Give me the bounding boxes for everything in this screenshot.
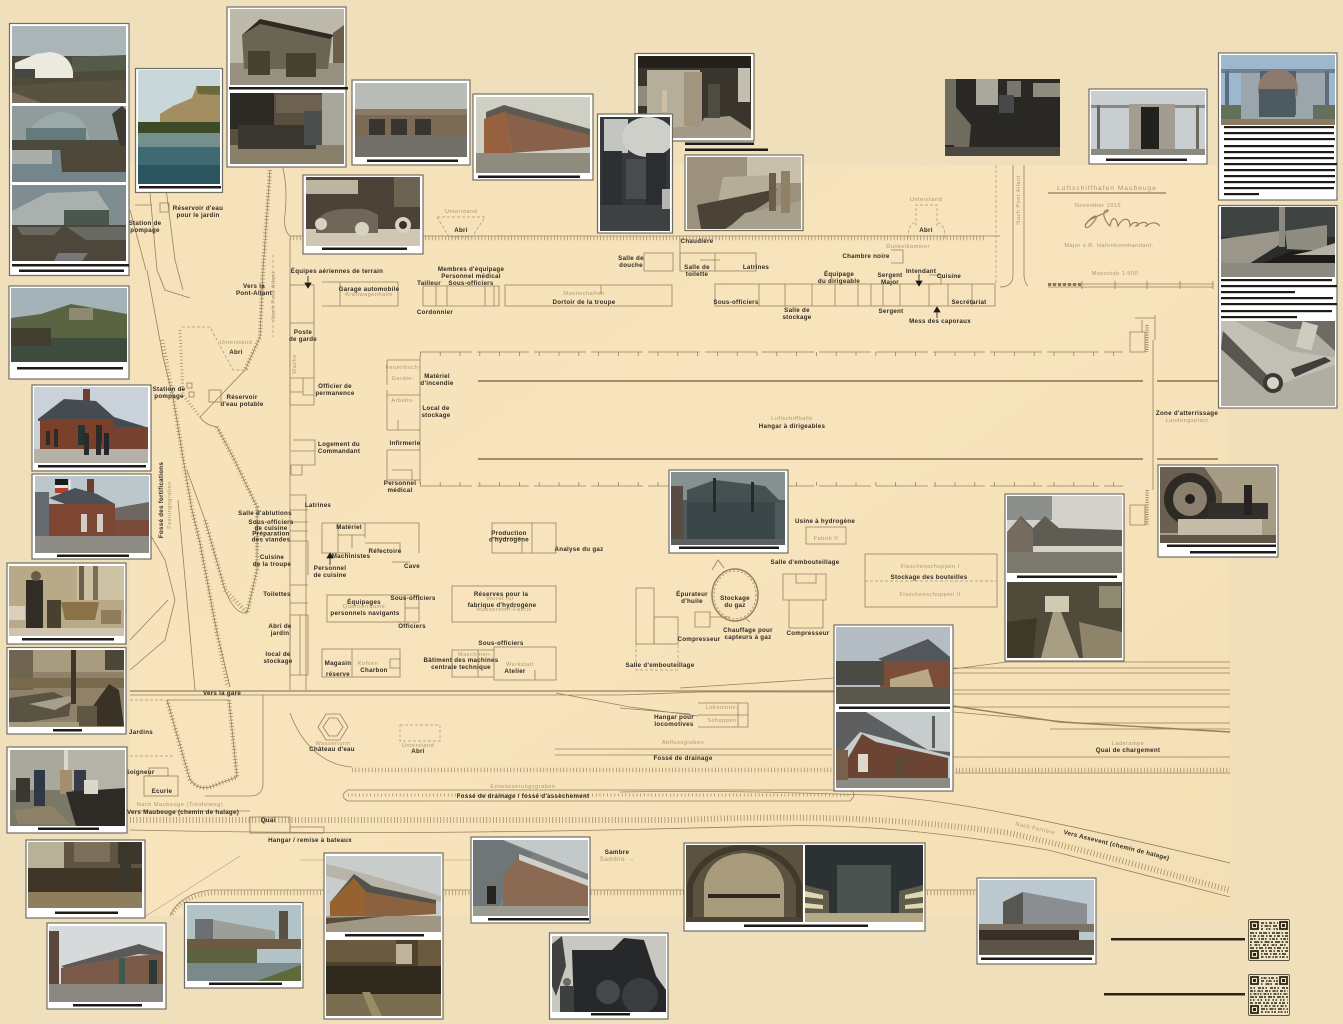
label: airship hangar: Hangar à dirigeables <box>759 423 826 430</box>
label: cellar: Cave <box>404 563 420 570</box>
photo: men at bench <box>230 93 344 164</box>
label: shelter south: Abri <box>411 748 425 755</box>
label: gas storage: du gaz <box>724 602 746 609</box>
label: compressor west: Compresseur <box>678 636 721 643</box>
label: equipment: Matériel <box>336 524 362 531</box>
label: gas analysis: Analyse du gaz <box>555 546 603 553</box>
label: troop kitchen: de la troupe <box>253 561 291 568</box>
label: flying personnel: personnels navigants <box>330 610 400 617</box>
label: gas heating: Chauffage pour <box>723 627 773 634</box>
label: officers: Officiers <box>398 623 426 630</box>
caption rules below office photo <box>685 142 768 151</box>
label: shower room: Salle de <box>618 255 644 262</box>
label: dormitory: Dortoir de la troupe <box>552 299 616 306</box>
caption bar <box>981 958 1092 960</box>
crew quarters: Quartierräume <box>343 604 385 610</box>
site plan linework <box>130 165 1230 916</box>
label: NCOs south: Sous-officiers <box>478 640 524 647</box>
photo card: fortress wall and water <box>136 68 222 192</box>
label: to Pont-Allant: Pont-Allant <box>236 290 272 297</box>
photo: concrete trough <box>1221 207 1335 277</box>
caption bar <box>478 176 580 178</box>
photo: bottle store interior <box>1007 582 1122 658</box>
gas holder <box>712 560 758 622</box>
commander line: Major z.R. Hafenkommandant. <box>1064 243 1154 249</box>
label: sergeant major: Sergent <box>878 272 902 279</box>
label: shower room: douche <box>619 262 643 269</box>
photo: hangar and roofs <box>12 185 126 261</box>
label: duty officer: permanence <box>315 390 355 397</box>
leader line 2 <box>1104 993 1245 996</box>
photo: gas works exterior <box>1007 496 1122 573</box>
label: pump station: pompage <box>154 393 184 400</box>
label: secretariat: Secrétariat <box>951 299 987 306</box>
label: ground crew: Équipes aériennes de terrain <box>291 267 383 275</box>
label: garden shelter: jardin <box>270 630 289 637</box>
reserve: Vorrat für <box>486 596 514 602</box>
label: latrines: Latrines <box>305 502 331 509</box>
caption bar <box>209 982 282 985</box>
label: guard post: Poste <box>294 329 312 336</box>
leader line 1 <box>1111 938 1245 940</box>
label: oil purifier: Épurateur <box>676 591 708 598</box>
photo card: office doorway <box>635 54 754 141</box>
label: fortification moat: Fossé des fortifications <box>158 462 165 538</box>
label: toilet room: toilette <box>686 271 709 278</box>
label: airship crew: du dirigeable <box>818 278 860 285</box>
towpath: Nach Maubeuge (Treidelweg) <box>137 802 223 808</box>
label: NCOs east: Sous-officiers <box>713 299 759 306</box>
caption bar <box>19 270 124 272</box>
caption bar <box>1106 158 1187 161</box>
label: hydrogen plant: Usine à hydrogène <box>795 518 855 525</box>
shelter south: Unterstand <box>402 743 434 749</box>
label: landing zone: Zone d'atterrissage <box>1156 410 1218 417</box>
photo: hangar and moat <box>12 106 126 182</box>
caption rule <box>229 87 348 90</box>
label: reserve: réserve <box>326 671 350 678</box>
caption bar <box>488 918 589 920</box>
locomotive shed <box>698 703 748 727</box>
label: garden shelter: Abri de <box>268 623 292 630</box>
caption bar <box>73 1004 142 1006</box>
photo: brick depot <box>326 856 441 932</box>
loco shed: Lokomotiv- <box>706 705 738 711</box>
photo: brick house with crane <box>836 712 950 788</box>
photo card: barracks bedroom <box>7 648 126 734</box>
label: kitchen staff: de cuisine <box>313 572 347 579</box>
photo: house with sacks <box>836 627 950 704</box>
label: hydrogen production: d'hydrogène <box>489 536 529 544</box>
label: wash room: Salle d'ablutions <box>238 510 292 517</box>
label: storage room east: stockage <box>782 314 812 321</box>
photo card: brick guardhouse with soldiers <box>32 385 151 471</box>
hydrogen plant II and compressor <box>783 527 846 628</box>
label: crew members: Sous-officiers <box>448 280 494 287</box>
label: Sambre: Sambre <box>605 849 629 856</box>
caption bar <box>55 912 118 914</box>
label: groom: Soigneur <box>125 769 155 776</box>
photo card: locomotive <box>550 933 668 1019</box>
label: drinking water reservoir: d'eau potable <box>220 401 264 408</box>
label: machine building: centrale technique <box>431 664 491 671</box>
label: troop kitchen: Cuisine <box>260 554 284 561</box>
caption bar <box>744 924 868 927</box>
label: toilet room: Salle de <box>684 264 710 271</box>
magazine and workshop block <box>322 647 556 680</box>
label: to the station: Vers la gare <box>203 690 241 697</box>
label: duty officer: Officier de <box>318 383 352 390</box>
eastern barracks <box>644 238 995 306</box>
label: to Maubeuge: Vers Maubeuge (chemin de halage) <box>127 809 239 816</box>
photo group: coloured brick workshops <box>324 853 443 1019</box>
label: kitchen NCOs: de cuisine <box>254 525 288 532</box>
signature Massus <box>1085 210 1160 228</box>
label: infirmary: Infirmerie <box>390 440 421 447</box>
caption rule <box>12 264 129 266</box>
label: quartermaster: Intendant <box>906 268 936 275</box>
label: guard post: de garde <box>289 336 317 343</box>
label: latrines east: Latrines <box>743 264 769 271</box>
label: gardens: Jardins <box>129 729 153 736</box>
loading ramp: Laderampe <box>1112 741 1144 747</box>
QR code 2 <box>1248 974 1290 1016</box>
photo card: gas holder frame <box>669 470 788 553</box>
western building row <box>290 285 315 690</box>
label: stable: Ecurie <box>152 788 173 795</box>
label: sergeant major: Major <box>881 279 899 286</box>
photo group: wooden hut and workshop <box>227 7 348 167</box>
cylinder storage sheds <box>865 554 997 607</box>
garage and workshops <box>322 282 672 306</box>
label: pump station north: pompage <box>130 227 160 234</box>
photo card: brick building with flag <box>32 474 151 559</box>
coal: Kohlen <box>358 661 378 667</box>
hydrogen factory: Wasserstoff-Fabrik <box>476 607 532 613</box>
text card: top right with hangar photo <box>1218 53 1337 200</box>
caption bar <box>38 828 99 830</box>
hangar: Luftschiffhalle <box>771 416 813 422</box>
photo: composite hangar front <box>1221 55 1335 125</box>
bottle sheds: Flaschenschuppen I <box>900 564 960 570</box>
reservoirs and pump stations <box>160 203 221 402</box>
caption rule <box>1167 544 1276 547</box>
photo group: hangars at Maubeuge <box>10 24 129 276</box>
hydrogen production block <box>492 523 556 553</box>
photo: concrete pit <box>1221 321 1335 406</box>
photo card: kitchen staff at stove <box>7 747 127 833</box>
drainage ditch: Entwässerungsgraben <box>490 784 556 790</box>
label: compressor east: Compresseur <box>787 630 830 637</box>
label: bottling room west: Salle d'embouteillage <box>626 662 695 669</box>
garage: Kraftwagenhalle <box>345 292 393 298</box>
label: machine building: Bâtiment des machines <box>424 657 498 664</box>
label: to Assevent: Vers Assevent (chemin de halage) <box>1063 829 1170 862</box>
crew quarters and reserve area <box>327 586 556 622</box>
photo group: small brick houses <box>834 625 953 791</box>
label: reserves: Réserves pour la <box>474 591 528 598</box>
label: fire equipment: d'incendie <box>420 380 454 387</box>
label: hydrogen factory: fabrique d'hydrogène <box>468 602 537 609</box>
faded fortification label: Festungsgraben <box>167 481 173 529</box>
label: NCOs: Sous-officiers <box>390 595 436 602</box>
label: kitchen NCOs: Préparation <box>252 530 290 538</box>
label: airship crew: Équipage <box>824 271 854 278</box>
dark room: Dunkelkammer <box>886 244 930 250</box>
redacted text lines <box>1224 126 1337 195</box>
photo card: boiler room <box>598 114 674 233</box>
label: commander housing: Logement du <box>318 441 360 448</box>
label: toilets: Toilettes <box>263 591 291 598</box>
scale label: Massstab 1:500 <box>1092 271 1138 277</box>
photo card: low brick barracks <box>47 923 166 1009</box>
label: kitchen NCOs: Sous-officiers <box>248 519 294 526</box>
photo card: officer in workshop <box>7 563 126 644</box>
photo: hangar frame arch <box>686 845 803 922</box>
shelter: Unterstand <box>445 209 477 215</box>
label: to Pont-Allant: Vers la <box>243 283 265 290</box>
label: locomotive shed: Hangar pour <box>654 714 694 721</box>
caption bar <box>139 186 221 188</box>
caption bar <box>839 706 950 709</box>
photo: dark interior <box>326 940 441 1016</box>
arrow: corporals mess <box>934 307 940 318</box>
label: medical staff: médical <box>387 487 413 494</box>
label: storage room: local de <box>265 651 291 658</box>
fire station: Feuerlösch- <box>385 365 421 371</box>
label: garden reservoir: pour le jardin <box>176 212 220 219</box>
photo card: brick barracks <box>473 94 593 180</box>
machinery: Maschinen- <box>458 652 492 658</box>
label: shelter: Abri <box>229 349 243 356</box>
label: shelter east: Abri <box>919 227 933 234</box>
caption bar <box>367 160 458 162</box>
photo: hangar interior <box>805 845 923 922</box>
towpath east: Nach Ferrière <box>1015 822 1056 837</box>
QR code 1 <box>1248 920 1290 960</box>
caption bar <box>57 554 129 557</box>
French map labels <box>125 205 1218 862</box>
label: garden reservoir: Réservoir d'eau <box>173 205 223 212</box>
label: store: Magasin <box>325 660 351 667</box>
caption bar <box>38 465 146 468</box>
stables and quay <box>144 768 324 833</box>
photo: soldiers by hut <box>230 9 344 85</box>
drainage: Abflussgraben <box>662 740 704 746</box>
photo card: workers at trough <box>685 155 803 230</box>
label: cobbler: Cordonnier <box>417 309 453 316</box>
photo card: citadel hillside <box>9 286 129 379</box>
caption bar <box>1190 551 1276 554</box>
water tower plan <box>318 714 348 740</box>
Sambre river towpath <box>130 791 1230 916</box>
airship hangar walls and rails <box>420 315 1230 525</box>
label: commander housing: Commandant <box>318 448 360 455</box>
label: kitchen NCOs: des viandes <box>252 536 291 544</box>
arrow: quartermaster <box>916 274 922 286</box>
shelter east: Unterstand <box>910 197 942 203</box>
label: crew members: Personnel médical <box>441 273 501 280</box>
photo: machinery hall, no frame <box>945 79 1060 156</box>
label: quay: Quai <box>261 817 275 824</box>
bottle sheds II: Flaschenschuppen II <box>899 592 961 598</box>
guardhouse: Wache <box>292 354 298 374</box>
redacted text lines <box>1221 279 1337 318</box>
service buildings along hangar <box>387 360 420 480</box>
photo card: hangar and train <box>977 878 1096 964</box>
label: bottling room: Salle d'embouteillage <box>771 559 840 566</box>
photo: white hangar <box>12 26 126 103</box>
water tower: Wasserturm <box>316 741 350 747</box>
caption bar <box>322 248 407 250</box>
caption bar <box>53 729 82 732</box>
label: hydrogen production: Production <box>491 530 527 537</box>
label: storage: stockage <box>421 412 451 419</box>
photo card: flywheel engine <box>1158 465 1278 557</box>
label: crew members: Membres d'équipage <box>438 266 504 273</box>
label: kitchen staff: Personnel <box>314 565 346 572</box>
label: pump station north: Station de <box>129 220 161 227</box>
rail tracks <box>130 662 1230 732</box>
location arrows <box>305 274 940 565</box>
dormitory: Mannschaften <box>563 291 605 297</box>
QR code with rule 1 <box>1111 920 1290 960</box>
label: drainage ditch: Fossé de drainage / fossé d'assèchement <box>457 793 589 800</box>
photo card: automobile in garage <box>303 175 423 254</box>
photo group: hangar under construction and interior <box>684 843 925 931</box>
bottling hall and compressors <box>636 588 730 670</box>
photo card: hangar door model <box>1089 89 1207 164</box>
caption bar <box>17 367 123 370</box>
label: bottle storage: Stockage des bouteilles <box>891 574 968 581</box>
photo card: machine building gable <box>471 837 590 923</box>
label: dark room: Chambre noire <box>842 253 890 260</box>
shelter west: Unterstand <box>220 340 252 346</box>
label: storage room east: Salle de <box>784 307 810 314</box>
photo card: hangar with water tower <box>184 902 303 988</box>
plan paper sheet <box>130 165 1229 916</box>
northern perimeter fence <box>290 165 1028 287</box>
plan scale bar <box>1048 281 1213 289</box>
label: kitchen: Cuisine <box>937 273 961 280</box>
drainage ditches and canal <box>290 713 1230 801</box>
label: boat shed: Hangar / remise à bateaux <box>268 837 352 844</box>
river name: Sambre → <box>599 856 635 863</box>
label: gas storage: Stockage <box>720 595 750 602</box>
label: locomotive shed: locomotives <box>654 721 694 728</box>
loco shed II: Schuppen <box>707 718 737 724</box>
text card: right with concrete structures <box>1218 206 1337 408</box>
label: pump station: Station de <box>153 386 185 393</box>
southern moat <box>130 695 263 796</box>
label: oil purifier: d'huile <box>681 598 703 605</box>
label: workshop: Atelier <box>504 668 526 675</box>
QR code with rule 2 <box>1104 974 1290 1016</box>
plan title: Luftschiffhafen Maubeuge <box>1057 185 1157 192</box>
landing ground: Landungsplatz <box>1166 418 1208 424</box>
label: storage room: stockage <box>263 658 293 665</box>
photo card: long brick garage <box>352 80 470 165</box>
photo card: mess hall <box>26 840 145 918</box>
photo group: gas works sheds <box>1005 494 1124 661</box>
label: water tower: Château d'eau <box>309 746 355 753</box>
label: drainage: Fossé de drainage <box>653 755 713 762</box>
arrow: ground crew <box>305 276 311 288</box>
label: storage: Local de <box>422 405 450 412</box>
canteen block <box>322 523 419 562</box>
fortification moat west <box>130 165 290 690</box>
label: shelter top: Abri <box>454 227 468 234</box>
hydrogen plant: Fabrik II <box>814 536 838 542</box>
vertical road labels: Nach Pont Allant <box>1016 175 1022 225</box>
work space: Arbeits- <box>391 398 415 404</box>
title underline <box>1048 192 1166 194</box>
label: boiler: Chaudière <box>681 238 714 245</box>
arrow: kitchen staff <box>327 553 333 565</box>
label: fire equipment: Matériel <box>424 373 450 380</box>
label: refectory: Réfectoire <box>368 548 402 555</box>
faded German plan labels <box>137 175 1208 863</box>
label: gas heating: capteurs à gaz <box>725 634 771 641</box>
label: car garage: Garage automobile <box>339 286 400 293</box>
label: drinking water reservoir: Réservoir <box>226 394 258 401</box>
label: crews: Équipages <box>347 598 381 606</box>
vertical road label west: Nach Pont Allant <box>271 271 277 321</box>
caption bar <box>1017 576 1117 578</box>
label: medical staff: Personnel <box>384 480 416 487</box>
label: sergeant: Sergent <box>878 308 904 315</box>
shelter outlines <box>400 205 945 741</box>
label: corporals mess: Mess des caporaux <box>909 318 971 325</box>
workshop: Werkstatt <box>506 662 534 668</box>
caption bar <box>591 1013 630 1016</box>
equipment store: Geräte- <box>392 376 414 382</box>
caption bar <box>345 934 424 936</box>
plan date: November 1916 <box>1075 203 1121 209</box>
caption bar <box>679 546 779 549</box>
vertical road to Pont-Allant <box>273 238 290 690</box>
label: machinists: Machinistes <box>332 553 371 560</box>
label: tailor: Tailleur <box>417 280 441 287</box>
caption bar <box>22 638 114 640</box>
label: loading quay: Quai de chargement <box>1096 747 1160 754</box>
label: coal: Charbon <box>360 667 388 674</box>
